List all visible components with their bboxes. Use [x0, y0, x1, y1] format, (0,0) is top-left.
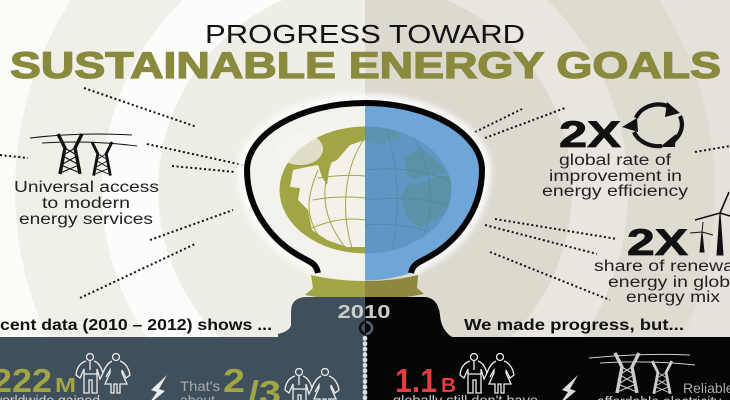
- bulb fill: [247, 103, 482, 280]
- heading: recent data: cent data (2010 – 2012) shows ...: [0, 317, 272, 334]
- block: energy efficiency: global rate of: [559, 152, 672, 169]
- stat: 1.1B: [393, 354, 538, 400]
- collar: [305, 275, 424, 300]
- year label: 2010: [338, 302, 390, 322]
- block: renewable share: energy mix: [626, 289, 720, 306]
- icon: people: [460, 354, 514, 393]
- block: energy efficiency: energy efficiency: [542, 183, 688, 200]
- stat: 222M: [0, 354, 130, 400]
- stat: 1.1B: 1.1: [395, 362, 437, 399]
- block: energy efficiency: improvement in: [549, 168, 682, 185]
- bulb glow: [247, 103, 482, 273]
- block: energy efficiency: 2X: [559, 114, 621, 155]
- icon: power towers: [30, 134, 137, 176]
- block: renewable share: energy in glob: [608, 274, 730, 291]
- bottom band: left slate panel: [0, 297, 365, 400]
- stat: reliable electricity: [589, 353, 730, 400]
- stat: two thirds: [180, 362, 339, 400]
- timeline marker: [360, 322, 372, 400]
- stat: 222M: M: [55, 375, 76, 397]
- block: renewable share: [594, 192, 730, 306]
- panel: light bulb with globe: [247, 103, 482, 300]
- background: left half with concentric rings: [0, 0, 282, 337]
- icon: power towers: [589, 353, 695, 394]
- title: SUSTAINABLE ENERGY GOALS: [10, 45, 721, 86]
- block: universal access: [14, 134, 159, 228]
- stat: 1.1B: B: [441, 375, 456, 397]
- block: renewable share: share of renewa: [594, 258, 730, 275]
- block: renewable share: 2X: [627, 222, 688, 263]
- icon: lightning: [148, 375, 167, 400]
- title: [10, 19, 721, 86]
- block: universal access: energy services: [19, 211, 153, 228]
- sun highlight: [288, 138, 323, 165]
- icon: people: [285, 368, 339, 400]
- bulb outline: [247, 103, 482, 273]
- heading: progress: We made progress, but...: [464, 317, 684, 334]
- globe: [279, 126, 452, 254]
- dotted rays: [0, 88, 730, 300]
- block: universal access: Universal access: [14, 179, 159, 196]
- stat: two thirds: That's: [180, 378, 220, 394]
- stat: two thirds: 2: [223, 362, 245, 399]
- block: energy efficiency: [542, 102, 688, 200]
- icon: wind turbines: [690, 192, 730, 255]
- bottom band: right black panel: [365, 297, 730, 400]
- title: PROGRESS TOWARD: [205, 19, 525, 49]
- background: right half with concentric rings: [365, 0, 730, 337]
- block: universal access: to modern: [42, 195, 130, 212]
- icon: people: [76, 354, 130, 393]
- icon: recycle arrows: [622, 102, 682, 147]
- icon: lightning: [559, 375, 578, 400]
